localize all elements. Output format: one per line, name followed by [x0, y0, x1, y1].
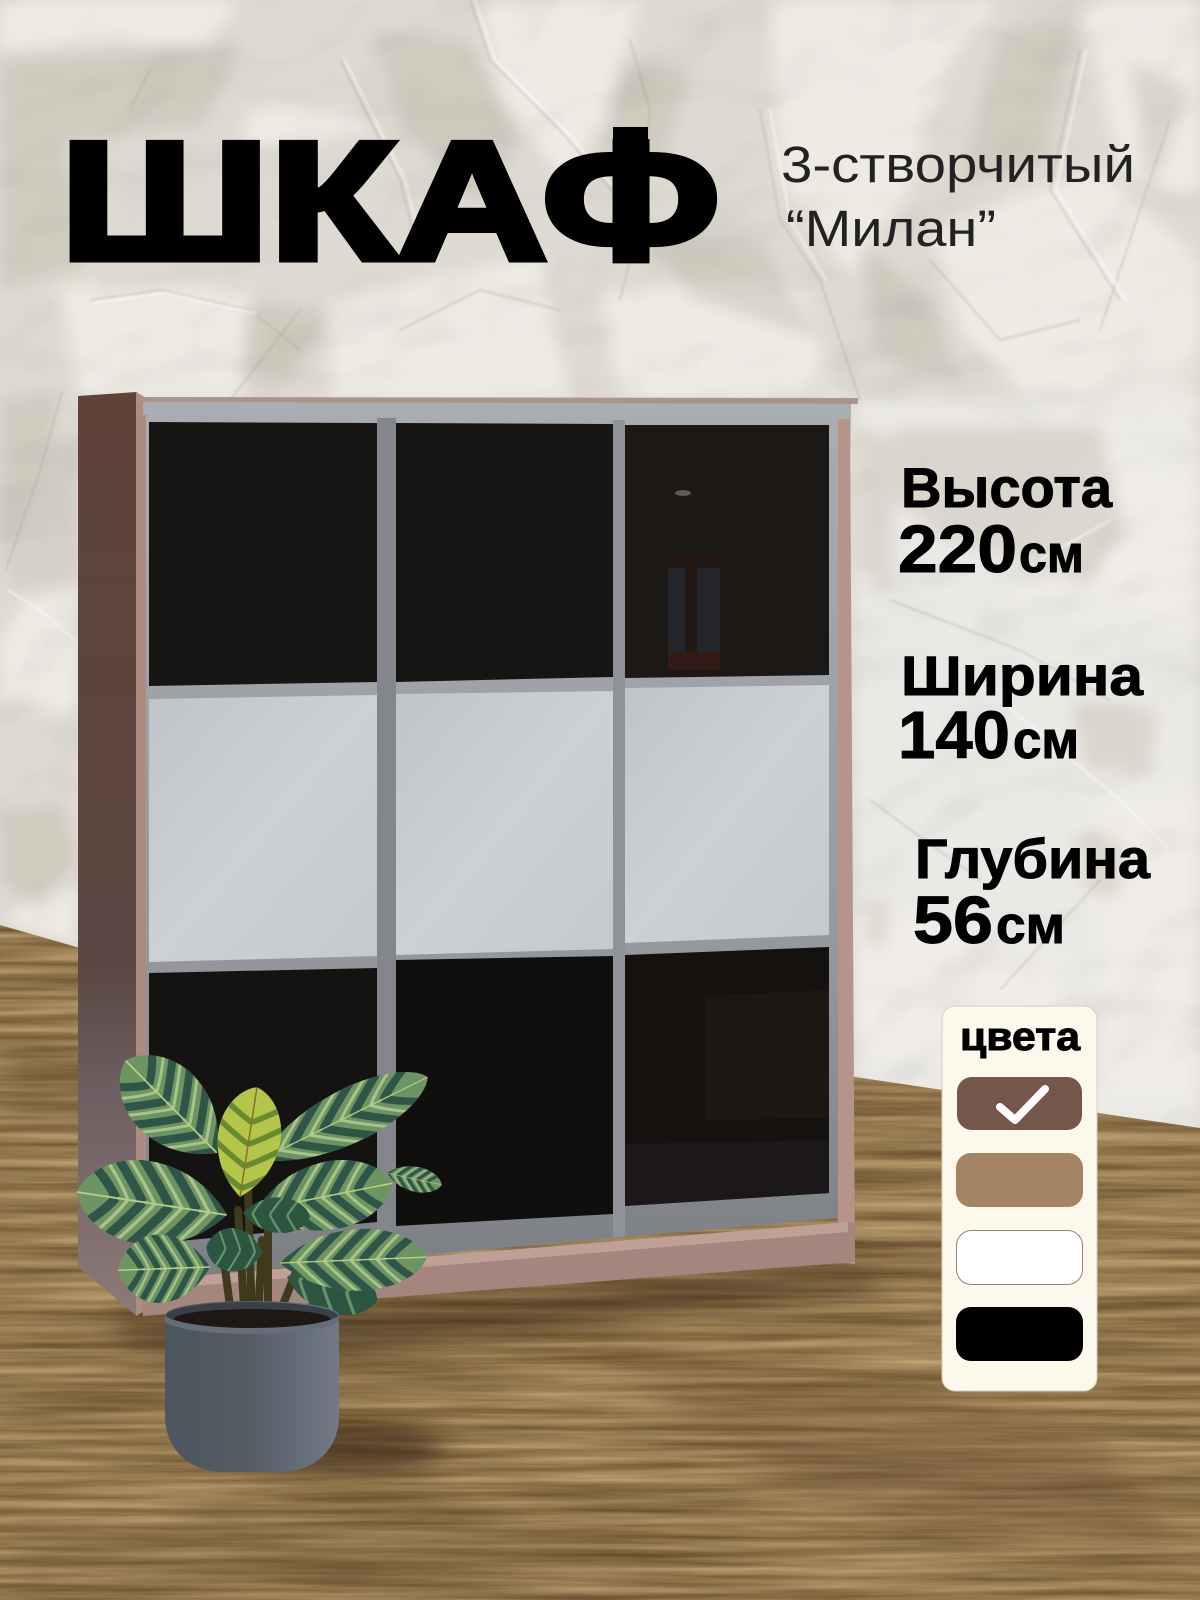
wardrobe right post: [838, 419, 855, 1264]
swatch: light oak: [956, 1153, 1083, 1207]
potted plant: [70, 1031, 445, 1472]
door rail 2: [613, 420, 625, 1238]
wardrobe top rail: [143, 402, 850, 419]
stems: [222, 1190, 300, 1322]
dimension: height: [898, 456, 1113, 587]
leaf: top right: [247, 1050, 441, 1187]
black glass: right bottom: [625, 947, 829, 1206]
leaf: lower left: [117, 1229, 211, 1308]
white glass: left: [149, 695, 377, 962]
pot shadow: [245, 1424, 445, 1476]
black glass: left bottom: [149, 968, 377, 1244]
leaf: centre dark: [242, 1193, 311, 1237]
swatch: black: [956, 1307, 1083, 1361]
dimension: height: см: [1019, 525, 1084, 584]
leaf: small dark round: [204, 1223, 266, 1277]
leaf: top left: [96, 1031, 247, 1183]
leaf: centre yellow: [206, 1082, 291, 1202]
dimension: width: Ширина: [901, 644, 1144, 707]
title: ШКАФ: [60, 107, 720, 295]
white glass: middle: [396, 691, 613, 955]
dimension: width: 140: [898, 698, 1010, 773]
black glass: middle top: [396, 423, 613, 682]
subtitle: “Милан”: [786, 200, 996, 257]
pot: [165, 1301, 339, 1472]
wardrobe: [78, 392, 858, 1316]
background: crumpled white paper wall: [0, 0, 1200, 1160]
background: wooden floor: [0, 925, 1200, 1600]
black glass: left top: [149, 422, 377, 686]
colour swatch card: [942, 1006, 1097, 1391]
subtitle: 3-створчитый: [781, 136, 1135, 193]
white glass: right: [625, 685, 829, 943]
dimension: depth: 56: [913, 883, 993, 958]
leaf: right middle: [250, 1146, 400, 1247]
swatch: dark walnut selected: [957, 1077, 1082, 1130]
wardrobe door frame: [143, 402, 851, 1280]
wardrobe floor shadow: [120, 1265, 900, 1370]
card heading: цвета: [960, 1015, 1081, 1059]
dimension: height: 220: [898, 512, 1017, 587]
wardrobe side panel: [78, 392, 137, 1316]
dimension: depth: см: [996, 896, 1065, 955]
leaf: lower right: [279, 1223, 428, 1297]
wardrobe plinth: [143, 1222, 855, 1316]
dimension: depth: [913, 827, 1151, 958]
dimension: height: Высота: [901, 456, 1113, 519]
wardrobe front left edge: [136, 392, 146, 1316]
black glass: middle bottom: [396, 956, 613, 1226]
wardrobe top cap: [137, 397, 858, 404]
dimension: width: см: [1013, 711, 1079, 770]
swatch: white: [956, 1230, 1082, 1284]
leaf: left large: [70, 1146, 234, 1261]
black glass: right top: [625, 425, 829, 678]
dimension: width: [898, 644, 1144, 773]
subtitle: [781, 136, 1135, 257]
leaf: lower right back: [280, 1251, 384, 1326]
leaf: far right small: [384, 1160, 445, 1198]
dimension: depth: Глубина: [915, 827, 1151, 890]
door rail 1: [377, 418, 396, 1252]
